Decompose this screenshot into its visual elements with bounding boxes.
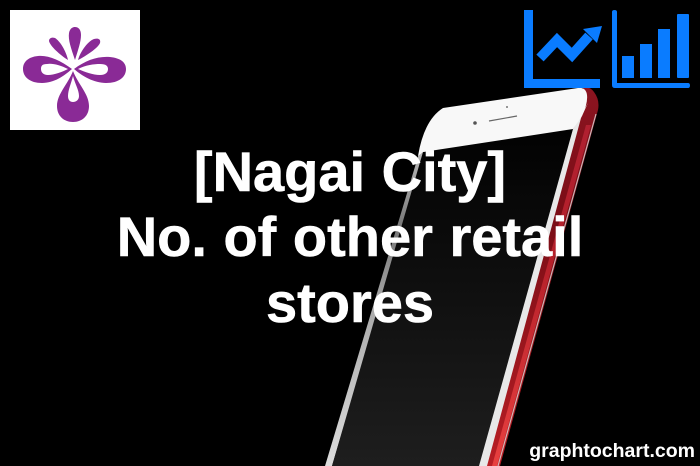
phone right bezel — [479, 103, 588, 466]
phone outer edge highlight — [498, 114, 596, 466]
title: [Nagai City] — [194, 140, 506, 203]
phone red frame — [485, 88, 598, 466]
title — [117, 140, 583, 334]
logo panel — [10, 10, 140, 130]
phone speaker and camera — [473, 106, 517, 125]
title: stores — [266, 271, 434, 334]
icon: line chart with rising arrow — [524, 10, 602, 88]
phone screen — [332, 129, 573, 466]
phone left edge — [325, 150, 426, 466]
title: No. of other retail — [117, 205, 583, 268]
phone photo — [325, 88, 598, 466]
phone white top — [418, 88, 587, 156]
logo: purple flower emblem — [23, 27, 126, 122]
watermark: graphtochart.com — [529, 440, 695, 462]
icon: bar chart — [612, 10, 690, 88]
